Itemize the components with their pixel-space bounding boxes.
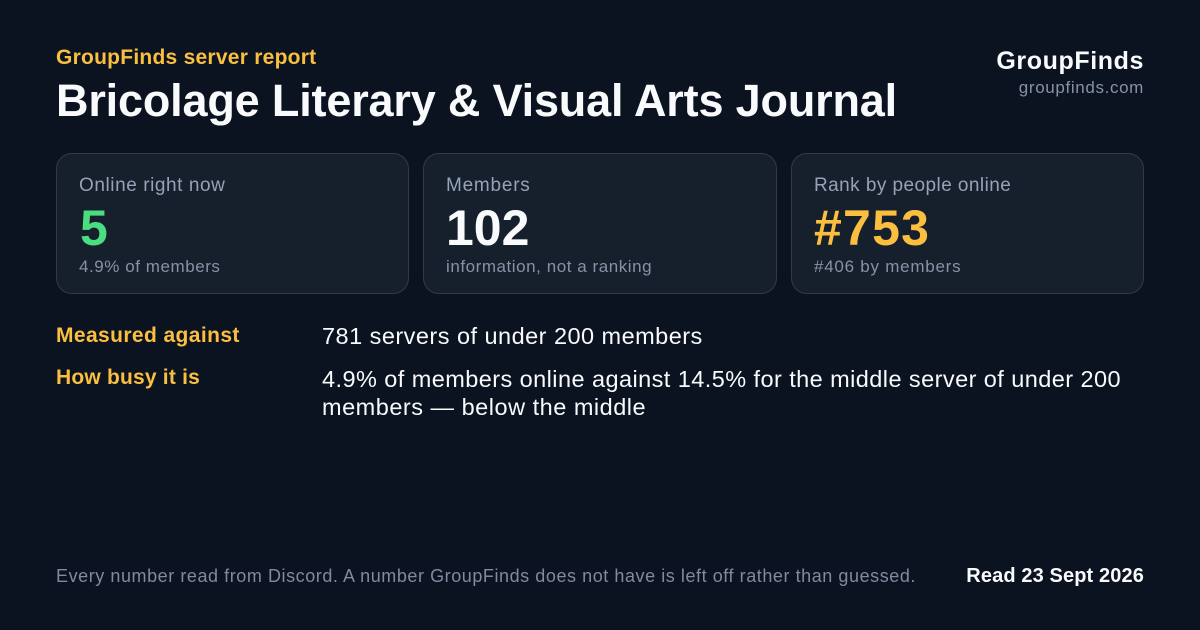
row label: how busy it is: How busy it is bbox=[56, 366, 200, 389]
row label: measured against: Measured against bbox=[56, 324, 240, 347]
brand name: GroupFinds bbox=[996, 47, 1144, 75]
server name title: Bricolage Literary & Visual Arts Journal bbox=[56, 75, 897, 126]
panel: rank by people online bbox=[791, 153, 1144, 294]
note: information, not a ranking bbox=[446, 257, 652, 276]
value: 5 bbox=[80, 200, 108, 256]
row text: how busy it is bbox=[322, 366, 1121, 420]
row text: measured against: 781 servers of under 200 members bbox=[322, 323, 703, 349]
label: Members bbox=[446, 175, 531, 196]
value: #753 bbox=[814, 200, 930, 256]
header: report title bbox=[56, 46, 897, 126]
brand block bbox=[996, 47, 1144, 97]
brand url: groupfinds.com bbox=[1019, 78, 1144, 97]
panel: members bbox=[423, 153, 777, 294]
row text: how busy it is: members — below the middle bbox=[322, 394, 646, 420]
value: 102 bbox=[446, 200, 529, 256]
footer note: Every number read from Discord. A number GroupFinds does not have is left off rather than guessed. bbox=[56, 566, 916, 586]
footer date: Read 23 Sept 2026 bbox=[966, 565, 1144, 587]
note: #406 by members bbox=[814, 257, 961, 276]
label: Online right now bbox=[79, 175, 225, 196]
note: 4.9% of members bbox=[79, 257, 220, 276]
label: Rank by people online bbox=[814, 175, 1011, 196]
row text: how busy it is: 4.9% of members online against 14.5% for the middle server of under 200 bbox=[322, 366, 1121, 392]
panel: online right now bbox=[56, 153, 409, 294]
eyebrow heading: GroupFinds server report bbox=[56, 46, 316, 69]
